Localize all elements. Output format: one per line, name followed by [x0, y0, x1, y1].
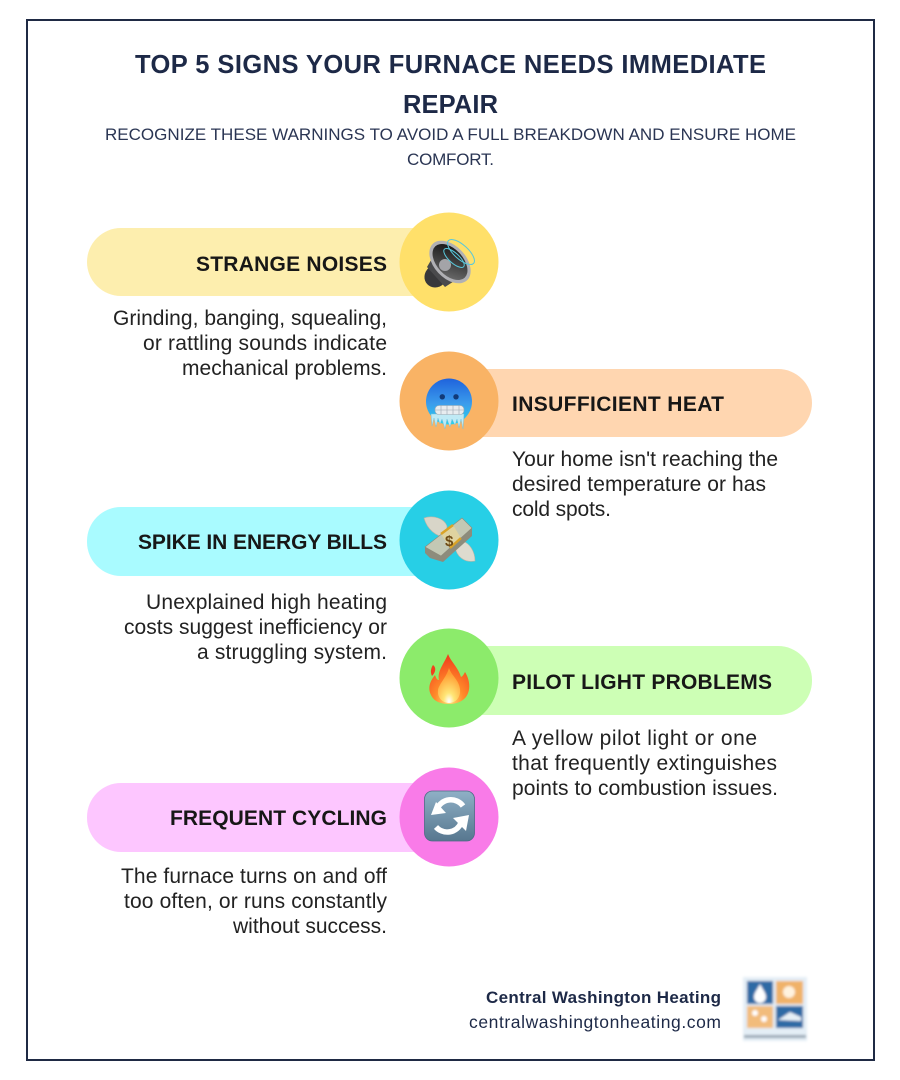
panel: pilot light problems: [400, 628, 812, 800]
description: pilot light problems: that frequently extinguishes: [512, 752, 777, 775]
description: strange noises: or rattling sounds indicate: [143, 332, 387, 355]
description: spike in energy bills: Unexplained high heating: [146, 591, 387, 614]
description: pilot light problems: A yellow pilot light or one: [512, 727, 757, 750]
description: spike in energy bills: [124, 591, 387, 664]
description: frequent cycling: The furnace turns on and off: [121, 865, 387, 888]
description: insufficient heat: cold spots.: [512, 498, 611, 521]
description: spike in energy bills: costs suggest inefficiency or: [124, 616, 387, 639]
icon: freezing face: [426, 378, 472, 429]
pill: frequent cycling: [87, 783, 449, 852]
icon: money with wings: $: [445, 533, 454, 550]
icon circle: yellow: [400, 212, 498, 312]
heading: pilot light problems: PILOT LIGHT PROBLEMS: [512, 671, 772, 694]
icon circle: green: [400, 628, 498, 728]
description: insufficient heat: [512, 448, 778, 521]
heading: strange noises: STRANGE NOISES: [196, 253, 387, 276]
panel: frequent cycling: [87, 768, 498, 938]
title: REPAIR: [403, 91, 498, 119]
description: insufficient heat: Your home isn't reaching the: [512, 448, 778, 471]
footer: company name and website: [469, 988, 721, 1032]
footer: company name and website: Central Washington Heating: [486, 988, 721, 1007]
description: strange noises: mechanical problems.: [182, 357, 387, 380]
footer: company name and website: centralwashingtonheating.com: [469, 1012, 721, 1032]
logo: [743, 977, 807, 1041]
subtitle: COMFORT.: [407, 150, 494, 169]
heading: frequent cycling: FREQUENT CYCLING: [170, 807, 387, 830]
panel: spike in energy bills: [87, 490, 498, 664]
description: strange noises: [113, 307, 387, 380]
description: spike in energy bills: a struggling system.: [197, 641, 387, 664]
description: insufficient heat: desired temperature or has: [512, 473, 766, 496]
description: frequent cycling: without success.: [232, 915, 387, 938]
pill: pilot light problems: [449, 646, 812, 715]
title: [135, 51, 766, 119]
description: strange noises: Grinding, banging, squealing,: [113, 307, 387, 330]
heading: insufficient heat: INSUFFICIENT HEAT: [512, 393, 724, 416]
icon: flame: [429, 654, 469, 704]
description: pilot light problems: [512, 727, 778, 800]
pill: strange noises: [87, 228, 449, 296]
heading: spike in energy bills: SPIKE IN ENERGY BILLS: [138, 531, 387, 554]
icon: speaker: [420, 233, 479, 292]
description: frequent cycling: [121, 865, 388, 938]
subtitle: [105, 125, 796, 169]
pill: insufficient heat: [449, 369, 812, 437]
icon: money with wings: [424, 517, 475, 562]
panel: strange noises: [87, 212, 498, 380]
title: TOP 5 SIGNS YOUR FURNACE NEEDS IMMEDIATE: [135, 51, 766, 79]
pill: spike in energy bills: [87, 507, 449, 576]
icon: cycle arrows: [424, 791, 474, 841]
icon circle: cyan: [400, 490, 498, 590]
description: pilot light problems: points to combustion issues.: [512, 777, 778, 800]
panel: insufficient heat: [400, 352, 812, 521]
icon circle: orange: [400, 352, 498, 450]
description: frequent cycling: too often, or runs constantly: [124, 890, 388, 913]
subtitle: RECOGNIZE THESE WARNINGS TO AVOID A FULL BREAKDOWN AND ENSURE HOME: [105, 125, 796, 144]
icon circle: pink: [400, 768, 498, 866]
